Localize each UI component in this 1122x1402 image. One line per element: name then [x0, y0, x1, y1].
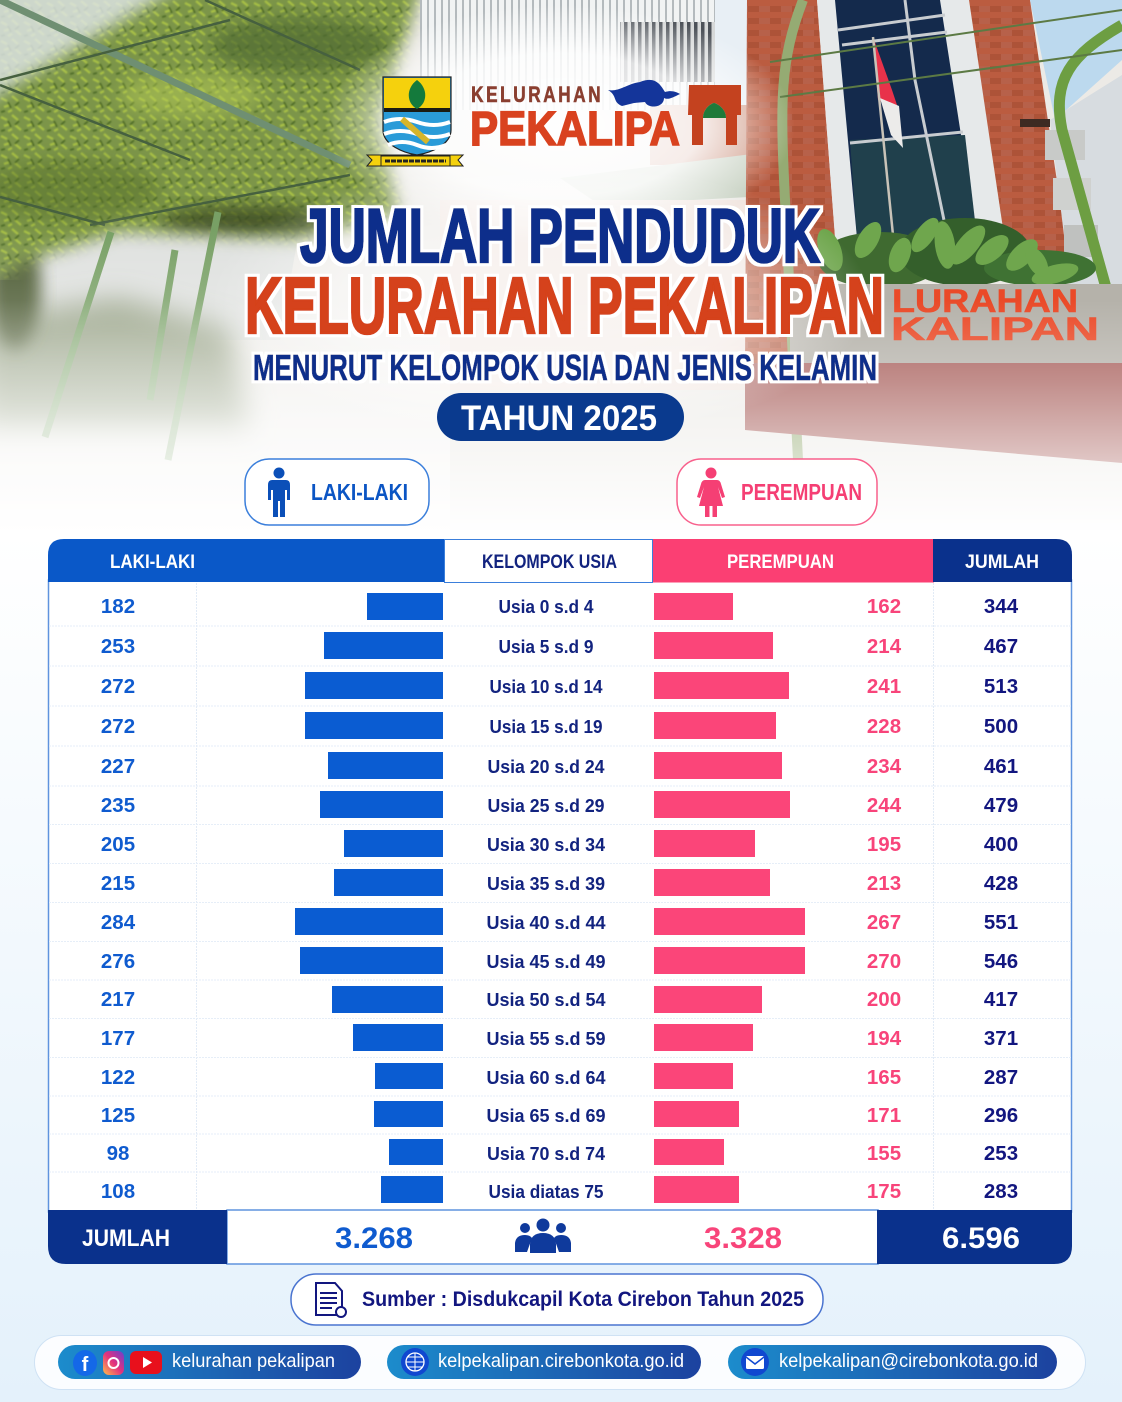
row: usia 45-49: 546 — [984, 950, 1018, 973]
row: usia 30-34: 205 — [101, 833, 135, 856]
row: usia 30-34: Usia 30 s.d 34 — [487, 835, 605, 855]
row: usia 0-4 — [101, 593, 1019, 620]
row: usia 15-19 — [101, 712, 1018, 739]
row: usia 20-24: 461 — [984, 755, 1018, 778]
header: kelompok usia: KELOMPOK USIA — [482, 552, 617, 573]
row: usia 0-4: 162 — [867, 595, 901, 618]
logo text: PEKALIPA — [470, 103, 680, 156]
row: usia 10-14: 513 — [984, 675, 1018, 698]
table — [48, 539, 1072, 1264]
row: usia 10-14: Usia 10 s.d 14 — [490, 677, 602, 697]
row: usia 40-44 — [101, 908, 1018, 935]
logo text: KELURAHAN — [471, 83, 601, 108]
social pill: kelurahan pekalipan — [172, 1350, 335, 1372]
icon: city crest — [367, 77, 463, 166]
row: usia 55-59: Usia 55 s.d 59 — [486, 1029, 606, 1049]
row: usia 70-74 — [107, 1139, 1018, 1165]
row: usia 35-39: 213 — [867, 872, 901, 895]
total row — [48, 1210, 1072, 1264]
row: usia 10-14 — [101, 672, 1018, 699]
row: usia 50-54: 200 — [867, 988, 901, 1011]
icon: globe — [401, 1348, 429, 1376]
header: laki-laki: LAKI-LAKI — [110, 552, 195, 573]
window glass — [835, 0, 977, 238]
flag — [873, 37, 903, 235]
building slats — [420, 0, 720, 110]
table body — [48, 580, 1072, 1212]
row: usia 65-69: Usia 65 s.d 69 — [486, 1106, 606, 1126]
fog behind header — [325, 5, 795, 245]
row: usia 20-24 — [101, 752, 1018, 779]
row: usia 35-39: 428 — [984, 872, 1018, 895]
icon: youtube — [130, 1351, 162, 1374]
row: usia 40-44: 284 — [101, 911, 136, 934]
header: perempuan — [653, 539, 934, 582]
row: usia 50-54: 417 — [984, 988, 1018, 1011]
source note: Sumber : Disdukcapil Kota Cirebon Tahun 2025 — [362, 1288, 804, 1311]
row: usia 70-74: 253 — [984, 1142, 1018, 1165]
garden wall — [0, 225, 300, 340]
email pill: kelpekalipan@cirebonkota.go.id — [779, 1350, 1038, 1372]
icon: mega mendung cloud — [608, 80, 680, 107]
row: usia 30-34: 400 — [984, 833, 1018, 856]
row: usia 40-44: 267 — [867, 911, 901, 934]
row: usia 50-54: Usia 50 s.d 54 — [486, 990, 606, 1010]
legend: laki-laki — [245, 459, 429, 525]
canopy — [560, 152, 768, 205]
row: usia 50-54: 217 — [101, 988, 135, 1011]
header: perempuan: PEREMPUAN — [727, 552, 834, 573]
logo group — [367, 77, 741, 166]
concrete planter — [790, 284, 1122, 363]
row: usia 0-4: 344 — [984, 595, 1019, 618]
row: usia 5-9: Usia 5 s.d 9 — [498, 637, 594, 657]
row: usia 70-74: 155 — [867, 1142, 901, 1165]
icon: people group — [515, 1218, 571, 1253]
row: usia 60-64: Usia 60 s.d 64 — [486, 1068, 606, 1088]
brick column left — [745, 0, 836, 370]
row: usia 15-19: 272 — [101, 715, 135, 738]
row: usia 25-29: 479 — [984, 794, 1018, 817]
row: usia diatas 75: 108 — [101, 1180, 135, 1203]
contact bar — [34, 1336, 1086, 1390]
social pill — [58, 1345, 361, 1379]
icon: heritage gate — [688, 85, 741, 145]
row: usia 20-24: 227 — [101, 755, 135, 778]
row: usia 35-39 — [101, 869, 1018, 896]
row: usia 65-69 — [101, 1101, 1018, 1127]
logo text — [470, 83, 680, 156]
row: usia diatas 75: 175 — [867, 1180, 901, 1203]
row: usia 25-29: Usia 25 s.d 29 — [488, 796, 604, 816]
total female: 3.328 — [704, 1222, 782, 1255]
row: usia 30-34 — [101, 830, 1018, 857]
ground fade — [0, 300, 1122, 535]
row: usia 65-69: 125 — [101, 1104, 135, 1127]
row: usia 55-59: 177 — [101, 1027, 135, 1050]
row: usia 60-64: 165 — [867, 1066, 901, 1089]
shrubs under the wall — [0, 300, 250, 430]
terracotta wall — [745, 363, 1122, 463]
air conditioners — [1045, 130, 1098, 257]
row: usia 55-59: 194 — [867, 1027, 902, 1050]
title line 1: JUMLAH PENDUDUK — [300, 194, 820, 279]
row: usia 5-9 — [101, 632, 1018, 659]
legend: perempuan — [677, 459, 877, 525]
garden trellis foliage — [0, 0, 460, 280]
row: usia 0-4: Usia 0 s.d 4 — [498, 597, 594, 617]
brick column right — [969, 0, 1069, 262]
row: usia 60-64: 287 — [984, 1066, 1018, 1089]
row: usia 10-14: 241 — [867, 675, 901, 698]
icon: male figure — [268, 468, 290, 517]
green pipes — [782, 0, 803, 460]
row: usia 25-29 — [101, 791, 1018, 818]
legend: laki-laki: LAKI-LAKI — [311, 479, 408, 505]
year badge — [437, 393, 684, 441]
icon: facebook — [73, 1350, 97, 1376]
left side haze — [0, 230, 450, 535]
row: usia 15-19: 500 — [984, 715, 1018, 738]
legend: perempuan: PEREMPUAN — [741, 479, 862, 505]
row: usia 30-34: 195 — [867, 833, 901, 856]
building sign: KALIPAN — [891, 311, 1099, 347]
icon: envelope — [741, 1348, 769, 1376]
icon: female figure — [697, 468, 725, 517]
total male: 3.268 — [335, 1222, 413, 1255]
header: jumlah — [933, 539, 1072, 582]
source note — [291, 1274, 823, 1325]
row: usia 20-24: 234 — [867, 755, 902, 778]
plants — [812, 213, 1096, 289]
header: jumlah: JUMLAH — [965, 552, 1039, 573]
row: usia 65-69: 296 — [984, 1104, 1018, 1127]
row: usia 60-64: 122 — [101, 1066, 135, 1089]
row: usia 65-69: 171 — [867, 1104, 901, 1127]
row: usia 50-54 — [101, 986, 1018, 1013]
row: usia 45-49: 276 — [101, 950, 135, 973]
row: usia 55-59: 371 — [984, 1027, 1018, 1050]
icon: instagram — [103, 1351, 124, 1375]
total label: JUMLAH — [82, 1225, 170, 1252]
row: usia 55-59 — [101, 1024, 1018, 1051]
icon: document — [316, 1283, 346, 1317]
row: usia 0-4: 182 — [101, 595, 135, 618]
row: usia 25-29: 235 — [101, 794, 135, 817]
total label — [48, 1210, 227, 1264]
year badge: TAHUN 2025 — [461, 399, 657, 438]
row: usia 20-24: Usia 20 s.d 24 — [488, 757, 604, 777]
building sign — [891, 283, 1099, 347]
trellis posts — [45, 212, 218, 460]
row: usia 45-49: Usia 45 s.d 49 — [486, 952, 606, 972]
sky and side wall — [1030, 0, 1122, 120]
row: usia 10-14: 272 — [101, 675, 135, 698]
website pill — [387, 1345, 701, 1379]
grand total — [877, 1210, 1072, 1264]
header: kelompok usia — [444, 540, 652, 582]
row: usia 60-64 — [101, 1063, 1018, 1089]
window frame — [817, 0, 1008, 250]
website pill: kelpekalipan.cirebonkota.go.id — [438, 1350, 684, 1372]
row: usia 70-74: 98 — [107, 1142, 129, 1165]
header: laki-laki — [48, 539, 444, 582]
row: usia 15-19: 228 — [867, 715, 901, 738]
brick wall behind canopy — [650, 105, 750, 165]
row: usia 5-9: 214 — [867, 635, 902, 658]
row: usia 40-44: 551 — [984, 911, 1018, 934]
building sign: LURAHAN — [892, 283, 1078, 319]
email pill — [728, 1345, 1057, 1379]
row: usia 45-49 — [101, 947, 1018, 974]
row: usia 5-9: 467 — [984, 635, 1018, 658]
icon: facebook: f — [82, 1354, 89, 1376]
grand total: 6.596 — [942, 1222, 1020, 1255]
row: usia diatas 75: 283 — [984, 1180, 1018, 1203]
row: usia 70-74: Usia 70 s.d 74 — [487, 1144, 605, 1164]
row: usia 15-19: Usia 15 s.d 19 — [490, 717, 602, 737]
row: usia 35-39: Usia 35 s.d 39 — [487, 874, 605, 894]
row: usia 35-39: 215 — [101, 872, 135, 895]
row: usia 25-29: 244 — [867, 794, 902, 817]
row: usia diatas 75 — [101, 1176, 1018, 1203]
row: usia diatas 75: Usia diatas 75 — [488, 1182, 604, 1202]
background photo: kelurahan office and garden — [0, 0, 1122, 468]
row: usia 40-44: Usia 40 s.d 44 — [486, 913, 606, 933]
row: usia 5-9: 253 — [101, 635, 135, 658]
subtitle: MENURUT KELOMPOK USIA DAN JENIS KELAMIN — [253, 347, 877, 388]
row: usia 45-49: 270 — [867, 950, 901, 973]
